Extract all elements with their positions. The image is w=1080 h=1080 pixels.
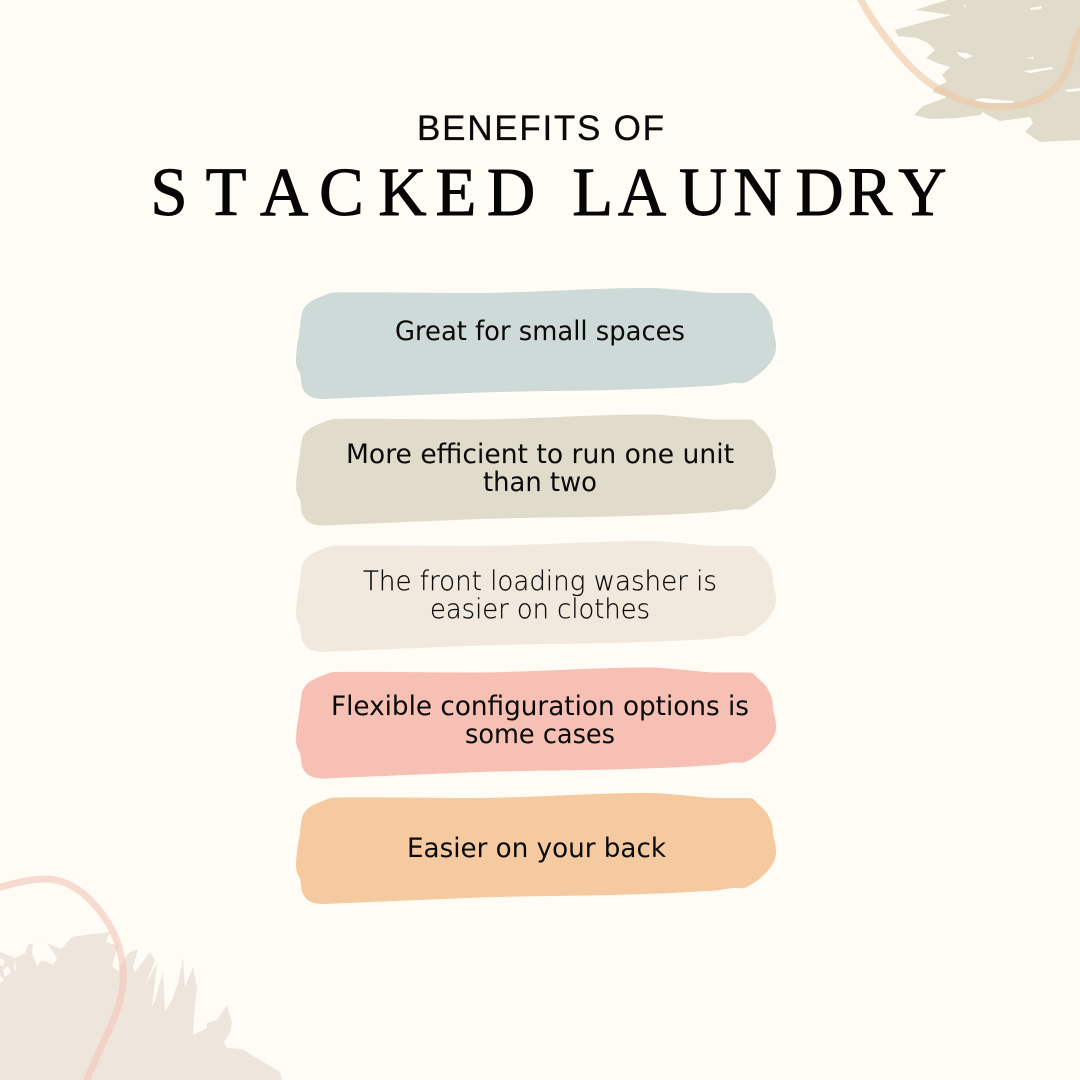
panel: more efficient <box>296 414 776 526</box>
panel: front loading washer: easier on clothes <box>430 594 650 625</box>
panel: more efficient: More efficient to run one unit <box>346 439 734 470</box>
panel: easier on your back: Easier on your back <box>407 833 666 864</box>
panel: great for small spaces: Great for small spaces <box>395 316 685 347</box>
panel: front loading washer <box>296 541 776 652</box>
background splash: bottom left <box>0 932 282 1080</box>
background splash: top right <box>895 0 1080 142</box>
subtitle: benefits of: BENEFITS OF <box>417 109 664 148</box>
panel: flexible configuration: Flexible configuration options is <box>331 691 749 722</box>
heading: stacked laundry: STACKED LAUNDRY <box>150 153 947 230</box>
panel: flexible configuration: some cases <box>465 719 615 750</box>
panel: great for small spaces <box>296 288 776 399</box>
decorative curve: bottom left <box>0 879 123 1080</box>
panel: more efficient: than two <box>483 467 597 498</box>
panel: easier on your back <box>296 793 776 904</box>
panel: front loading washer: The front loading washer is <box>363 566 717 597</box>
decorative curve: top right <box>860 0 1080 107</box>
title <box>150 109 947 230</box>
panel: flexible configuration <box>296 668 776 778</box>
